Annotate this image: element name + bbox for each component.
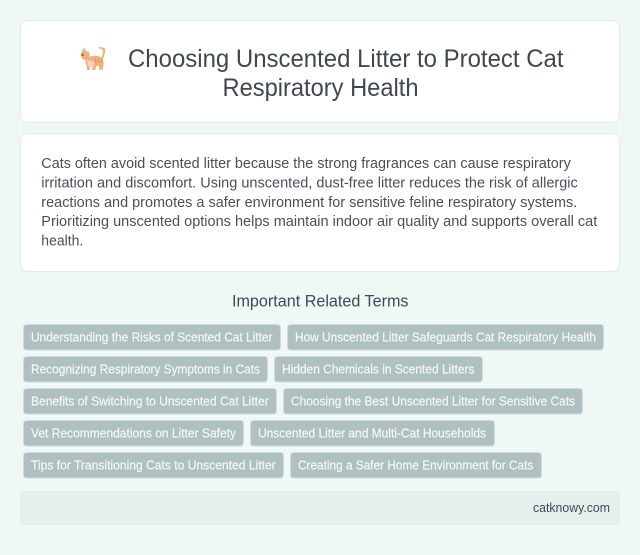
tag: Tips for Transitioning Cats to Unscented Litter [31,458,276,472]
panel: summary text [20,134,620,272]
tag: Recognizing Respiratory Symptoms in Cats [31,362,260,376]
title: Respiratory Health [222,74,418,102]
footer [20,491,620,525]
tag [24,452,284,478]
tag [24,420,244,446]
tag: Benefits of Switching to Unscented Cat Litter [31,394,269,408]
tag list [24,324,604,478]
panel: title card [20,20,620,122]
tag: Unscented Litter and Multi-Cat Households [258,426,486,440]
tag [290,452,542,478]
tag: Hidden Chemicals in Scented Litters [282,362,474,376]
text block: summary: irritation and discomfort. Using unscented, dust-free litter reduces the risk of allergic [41,174,578,192]
tag: Creating a Safer Home Environment for Cats [298,458,533,472]
heading: related terms: Important Related Terms [232,292,408,310]
tag [24,388,276,414]
tag: Vet Recommendations on Litter Safety [31,426,237,440]
tag [284,388,582,414]
footer text: catknowy.com [533,500,610,515]
text block: summary: health. [41,232,83,250]
title [128,45,564,102]
tag [274,356,482,382]
tag [250,420,494,446]
tag: Choosing the Best Unscented Litter for Sensitive Cats [291,394,575,408]
title: Choosing Unscented Litter to Protect Cat [128,45,564,73]
text block: summary [41,155,598,250]
tag [24,356,268,382]
tag: Understanding the Risks of Scented Cat Litter [31,330,273,344]
text block: summary: Cats often avoid scented litter because the strong fragrances can cause respiratory [41,155,571,172]
tag [288,324,604,350]
tag: How Unscented Litter Safeguards Cat Respiratory Health [295,330,596,344]
tag [24,324,280,350]
icon: cat [80,47,105,70]
text block: summary: reactions and promotes a safer environment for sensitive feline respiratory systems. [41,194,577,211]
text block: summary: Prioritizing unscented options helps maintain indoor air quality and supports overall cat [41,213,598,230]
